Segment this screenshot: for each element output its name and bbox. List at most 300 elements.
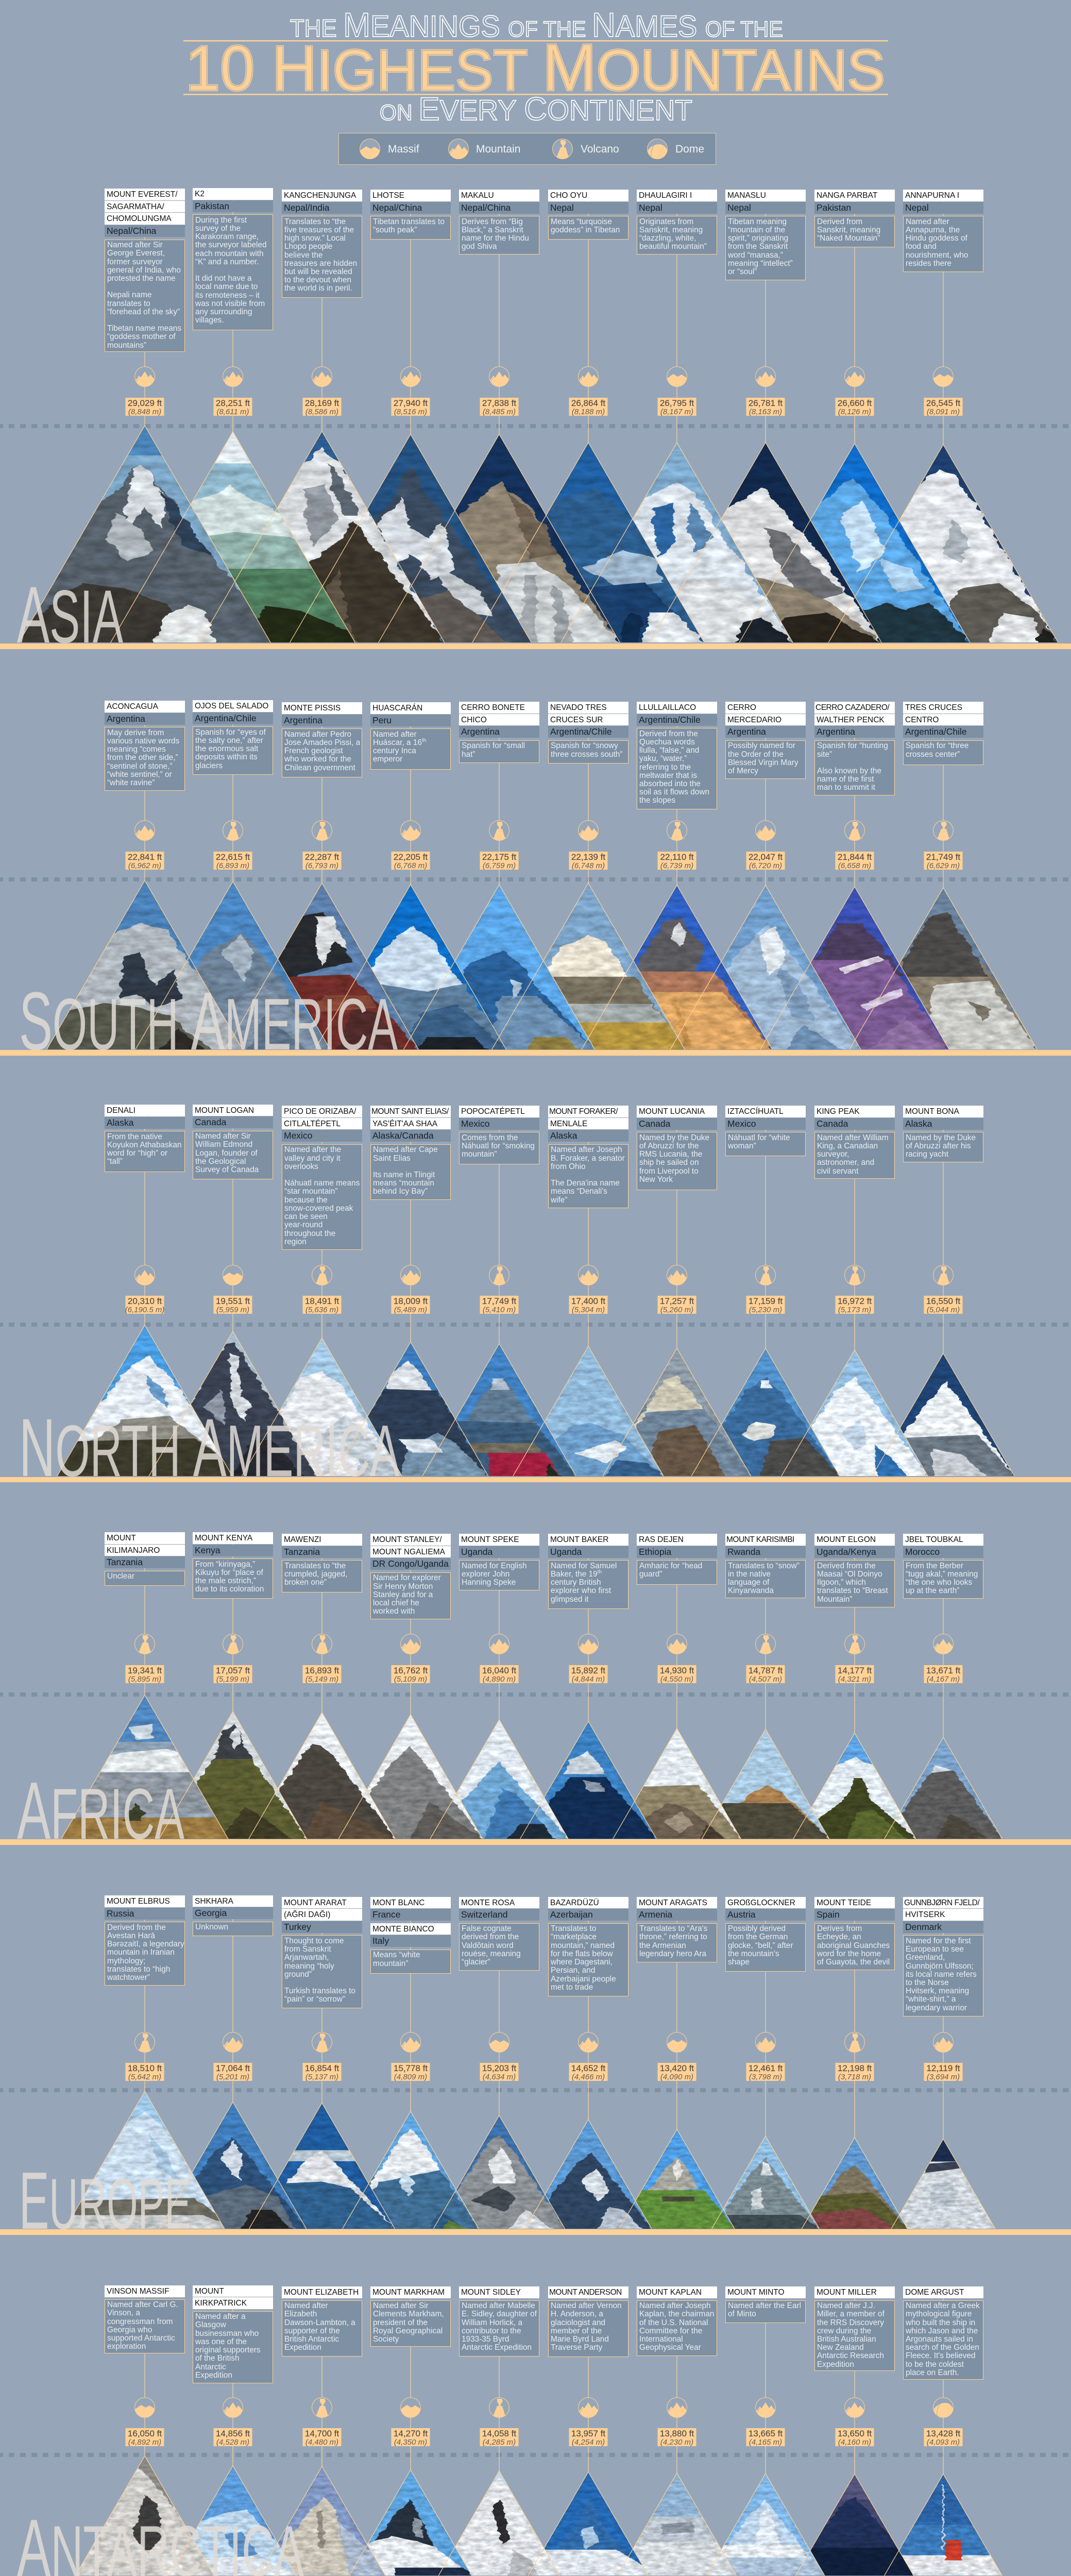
card: Mount Karisimbi: Translates to “snow” xyxy=(728,1562,800,1570)
card: Huascarán xyxy=(370,702,451,770)
card: Mount Elbrus: Bərəzaitī, a legendary xyxy=(107,1940,184,1948)
card: Mont Blanc / Monte Bianco: Means “white xyxy=(373,1951,420,1959)
elevation: Pico de Orizaba: 18,491 ft xyxy=(305,1296,339,1306)
icon: volcano xyxy=(756,1634,775,1654)
card: Mount Elizabeth: Named after xyxy=(284,2301,328,2310)
card: Mount Elgon: Maasai “Ol Doinyo xyxy=(817,1570,882,1579)
card: Bazardüzü: for the flats below xyxy=(551,1950,613,1958)
mountain outlines xyxy=(57,1325,1014,1476)
card: Mount Ararat: Turkey xyxy=(284,1922,311,1932)
elevation: Vinson Massif xyxy=(126,2428,164,2447)
card: Cerro Mercedario: Blessed Virgin Mary xyxy=(728,758,798,767)
card: Mount Everest: “forehead of the sky” xyxy=(107,308,180,316)
card: Mawenzi xyxy=(282,1534,362,1592)
card: Mount Speke xyxy=(459,1534,539,1590)
card: Cerro Bonete Chico: Argentina xyxy=(461,726,500,737)
card: Pico de Orizaba: Named after the xyxy=(284,1145,341,1154)
card: King Peak: Canada xyxy=(817,1118,848,1129)
card: Mount Foraker: from Ohio xyxy=(551,1162,586,1171)
card: Mount Teide: aboriginal Guanches xyxy=(817,1941,890,1950)
card: Kangchenjunga: treasures are hidden xyxy=(284,259,357,268)
card: Mount Everest: CHOMOLUNGMA xyxy=(107,214,172,223)
elevation: Mount Logan: (5,959 m) xyxy=(216,1306,249,1314)
elevation: Mount Elbrus: (5,642 m) xyxy=(128,2073,161,2081)
card: Mount Lucania: ship he sailed on xyxy=(639,1158,699,1167)
card: Dome Argust: Named after a Greek xyxy=(906,2301,980,2310)
elevation: Mount Kaplan: (4,230 m) xyxy=(660,2438,693,2447)
icon: mountain xyxy=(489,1634,509,1654)
elevation: Mount Bona xyxy=(924,1296,962,1314)
icon: mountain xyxy=(578,1634,599,1654)
card: Mount Anderson xyxy=(548,2286,628,2357)
elevation: Mount Kilimanjaro: (5,895 m) xyxy=(128,1675,161,1684)
card: Mount Everest: former surveyor xyxy=(107,258,163,266)
elevation: Llullaillaco: (6,739 m) xyxy=(660,861,693,870)
card: Mount Elbrus: mythology; xyxy=(107,1957,145,1965)
card: Mount Miller xyxy=(814,2286,895,2371)
card: Großglockner: from the German xyxy=(728,1933,788,1941)
icon: volcano xyxy=(933,1265,953,1285)
card: Mount Foraker: B. Foraker, a senator xyxy=(551,1154,625,1163)
card: Mount Everest: Nepali name xyxy=(107,291,151,299)
card: Cerro Mercedario: the Order of the xyxy=(728,750,784,759)
elevation: Mount Miller xyxy=(836,2428,874,2447)
card: Mount Logan: Canada xyxy=(195,1117,226,1127)
card: Mount Everest xyxy=(105,189,185,352)
photo: Tres Cruces Centro xyxy=(834,888,1052,1049)
photo: Shkhara xyxy=(147,2102,318,2229)
elevation: Lhotse: 27,940 ft xyxy=(394,398,428,408)
elevation: Dhaulagiri I xyxy=(657,398,696,416)
elevation: Manaslu: 26,781 ft xyxy=(749,398,783,408)
card: Huascarán: century Inca xyxy=(373,747,416,755)
card: Mount Foraker: wife” xyxy=(551,1196,568,1205)
card: Mount Miller: Miller, a member of xyxy=(817,2310,885,2318)
card: Mount Anderson: Marie Byrd Land xyxy=(551,2335,609,2344)
icon: volcano xyxy=(489,821,509,841)
elevation: Ojos del Salado xyxy=(213,852,252,870)
card: Monte Rosa xyxy=(459,1897,539,1971)
elevation: Mount Ararat: (5,137 m) xyxy=(305,2073,338,2081)
card: Mount Sidley: Antarctic Expedition xyxy=(462,2343,532,2352)
icon: mountain xyxy=(933,2032,954,2053)
elevation: Denali: (6,190.5 m) xyxy=(125,1306,164,1314)
elevation: Jbel Toubkal: 13,671 ft xyxy=(926,1666,960,1675)
elevation: Gunnbjørn Fjeld xyxy=(924,2063,962,2081)
card: Mount Speke: explorer John xyxy=(462,1570,509,1579)
card: Gunnbjørn Fjeld: “white-shirt,” a xyxy=(906,1995,956,2004)
icon: massif xyxy=(134,2398,155,2418)
card: Monte Pissis: Chilean government xyxy=(284,764,355,772)
photo: Mount Karisimbi xyxy=(691,1729,840,1839)
card: Mount Anderson: Traverse Party xyxy=(551,2343,602,2352)
card: Mount Lucania: from Liverpool to xyxy=(639,1167,699,1176)
elevation: Monte Pissis: 22,287 ft xyxy=(305,852,339,862)
photo: Cerro Mercedario xyxy=(655,885,876,1049)
card: Mount Foraker: MENLALE xyxy=(550,1120,587,1128)
elevation: Popocatépetl: (5,410 m) xyxy=(483,1306,516,1314)
card: Mount Stanley: MOUNT NGALIEMA xyxy=(372,1548,445,1556)
card: K2: It did not have a xyxy=(195,274,252,283)
card: Cerro Bonete Chico xyxy=(459,702,539,763)
card: Jbel Toubkal: JBEL TOUBKAL xyxy=(905,1535,963,1544)
photo: Mount Speke xyxy=(419,1720,580,1839)
card: Monte Rosa: “glacier” xyxy=(462,1958,490,1967)
card: Mount Bona: MOUNT BONA xyxy=(905,1107,959,1116)
card: Mount Kaplan: Committee for the xyxy=(639,2327,702,2335)
card: Nevado Tres Cruces Sur xyxy=(548,702,628,764)
card: Mount Foraker: Alaska xyxy=(550,1130,577,1141)
photo: Mount Miller xyxy=(786,2474,923,2575)
elevation: Mount Kaplan xyxy=(657,2428,696,2447)
card: Mount Aragats: Translates to “Ara's xyxy=(639,1924,707,1933)
elevation: Lhotse xyxy=(392,398,430,416)
card: Cerro Cazadero / Walther Penck: man to summit it xyxy=(817,783,875,792)
card: Dome Argust: DOME ARGUST xyxy=(905,2288,964,2297)
photo: Mount Everest xyxy=(0,426,291,642)
card: Großglockner: glocke, “bell,” after xyxy=(728,1941,793,1950)
elevation: Bazardüzü xyxy=(569,2063,608,2081)
card: K2 xyxy=(193,188,273,330)
photo: Iztaccíhuatl xyxy=(679,1348,852,1476)
icon: volcano xyxy=(489,1265,509,1285)
card: Mount Baker: Named for Samuel xyxy=(551,1562,617,1570)
card: Cho Oyu: Nepal xyxy=(550,202,574,213)
elevation: Denali: 20,310 ft xyxy=(128,1296,162,1306)
card: Mount Kenya xyxy=(193,1532,273,1599)
card: Cerro Mercedario: Possibly named for xyxy=(728,741,795,750)
card: Mount Stanley: worked with xyxy=(373,1607,415,1616)
card: Mount Elgon: MOUNT ELGON xyxy=(817,1535,876,1544)
card: Huascarán: HUASCARÁN xyxy=(372,704,422,713)
card: Mount Saint Elias: Alaska/Canada xyxy=(372,1130,434,1141)
elevation: Gunnbjørn Fjeld: (3,694 m) xyxy=(927,2073,960,2081)
icon: volcano xyxy=(489,2398,509,2418)
photo: Vinson Massif xyxy=(64,2456,226,2575)
card: Bazardüzü: “marketplace xyxy=(551,1933,597,1941)
elevation: Mount Elbrus: 18,510 ft xyxy=(128,2063,162,2073)
card: Mount Saint Elias xyxy=(370,1106,451,1200)
card: Pico de Orizaba: Náhuatl name means xyxy=(284,1179,360,1188)
icon: massif xyxy=(933,367,954,387)
card: Mount Logan: Survey of Canada xyxy=(195,1165,259,1174)
card: Mount Elizabeth: Expedition xyxy=(284,2343,321,2352)
card: Popocatépetl: Comes from the xyxy=(462,1133,518,1142)
card: Mount Kaplan: MOUNT KAPLAN xyxy=(639,2288,702,2297)
photo: Mount Baker xyxy=(509,1721,668,1839)
icon: mountain xyxy=(134,821,155,841)
elevation: Dome Argust xyxy=(924,2428,962,2447)
card: Gunnbjørn Fjeld: HVITSERK xyxy=(905,1910,945,1919)
elevation: Mount Minto: (4,165 m) xyxy=(749,2438,782,2447)
elevation: Mount Kenya: (5,199 m) xyxy=(216,1675,249,1684)
card: Llullaillaco: llulla, “false,” and xyxy=(639,746,699,755)
icon: mountain xyxy=(844,367,865,387)
icon: volcano xyxy=(312,1634,332,1654)
card: Mount Logan: Named after Sir xyxy=(195,1132,251,1141)
icon: volcano xyxy=(312,1265,332,1285)
panel: Europe xyxy=(0,1893,1071,2235)
icon: dome xyxy=(933,2398,954,2418)
card: Dhaulagiri I: Originates from xyxy=(639,217,693,226)
elevation: Bazardüzü: (4,466 m) xyxy=(572,2073,605,2081)
photo: Mount Saint Elias xyxy=(320,1342,501,1476)
elevation: Mount Elizabeth: (4,480 m) xyxy=(305,2438,338,2447)
card: Gunnbjørn Fjeld: European to see xyxy=(906,1945,964,1954)
card: Denali xyxy=(105,1105,185,1172)
elevation: Mount Kirkpatrick xyxy=(213,2428,252,2447)
card: Mount Stanley: MOUNT STANLEY/ xyxy=(372,1535,442,1544)
card: Ojos del Salado: the salty one,” after xyxy=(195,736,263,745)
elevation: Mont Blanc: 15,778 ft xyxy=(394,2063,428,2073)
elevation: Monte Rosa: (4,634 m) xyxy=(483,2073,516,2081)
card: Mount Karisimbi: language of xyxy=(728,1578,769,1587)
card: Mount Ararat: Thought to come xyxy=(284,1937,344,1945)
elevation: Mount Sidley xyxy=(480,2428,518,2447)
card: Tres Cruces Centro xyxy=(903,702,983,765)
chart: Asia elevations and mountains xyxy=(0,200,1071,649)
mountain outlines xyxy=(61,1695,1002,1839)
card: Mount Saint Elias: MOUNT SAINT ELIAS/ xyxy=(371,1107,449,1116)
elevation: Ras Dejen: 14,930 ft xyxy=(660,1666,694,1675)
elevation: Jbel Toubkal xyxy=(924,1665,962,1684)
card: Mawenzi: Tanzania xyxy=(284,1547,320,1557)
card: Dome Argust: which Jason and the xyxy=(906,2327,978,2335)
card: Mount Elizabeth: supporter of the xyxy=(284,2327,340,2335)
elevation: Mount Markham: 14,270 ft xyxy=(394,2429,428,2438)
elevation: Mount Everest xyxy=(126,398,164,416)
card: Manaslu: or “soul” xyxy=(728,267,757,276)
mountain outlines xyxy=(75,2456,1002,2575)
photo: Mount Elbrus xyxy=(52,2091,237,2229)
card: Denali: Koyukon Athabaskan xyxy=(107,1141,182,1149)
elevation: Popocatépetl xyxy=(480,1296,518,1314)
card: Pico de Orizaba: “star mountain” xyxy=(284,1187,338,1196)
icon: volcano xyxy=(553,139,572,159)
card: Bazardüzü: where Dagestani, xyxy=(551,1958,613,1967)
card: Mount Elgon: Mountain” xyxy=(817,1595,852,1604)
card: Tres Cruces Centro: Argentina/Chile xyxy=(905,726,967,737)
card: Mount Miller: Named after J.J. xyxy=(817,2301,875,2310)
photo: Jbel Toubkal xyxy=(875,1737,1012,1839)
card: Annapurna I: resides there xyxy=(906,259,951,268)
card: Manaslu: Tibetan meaning xyxy=(728,217,787,226)
card: Vinson Massif: VINSON MASSIF xyxy=(107,2287,169,2296)
icon: mountain xyxy=(578,1265,599,1285)
card: Mount Markham: Named after Sir xyxy=(373,2301,429,2310)
card: Mount Everest: protested the name xyxy=(107,274,176,283)
title line: The Meanings of the Names of the: THE MEANINGS OF THE NAMES OF THE xyxy=(290,6,783,44)
photo: Huascarán xyxy=(299,885,522,1049)
card: Mount Speke: Named for English xyxy=(462,1562,527,1570)
card: Monte Pissis: who worked for the xyxy=(284,755,351,764)
icon: mountain xyxy=(223,2032,243,2053)
photo: Mount Elgon xyxy=(783,1733,926,1839)
card: King Peak xyxy=(814,1106,895,1179)
icon: mountain xyxy=(400,821,421,841)
card: Großglockner: shape xyxy=(728,1958,750,1967)
card: Mount Ararat: from Sanskrit xyxy=(284,1945,331,1954)
elevation: Mount Ararat: 16,854 ft xyxy=(305,2063,339,2073)
card: Mount Miller: MOUNT MILLER xyxy=(817,2288,877,2297)
photo: Ras Dejen xyxy=(603,1728,751,1839)
card: King Peak: astronomer, and xyxy=(817,1158,874,1167)
card: Mount Saint Elias: YAS'ÉIT'AA SHAA xyxy=(372,1120,437,1128)
elevation: Mount Minto xyxy=(746,2428,785,2447)
card: Mount Ararat: (AĞRI DAĞI) xyxy=(284,1910,330,1919)
card: Monte Pissis: Argentina xyxy=(284,715,322,725)
card: Monte Pissis xyxy=(282,702,362,777)
elevation: Huascarán: 22,205 ft xyxy=(394,852,428,862)
card: Annapurna I: Named after xyxy=(906,217,949,226)
elevation: Mount Lucania: (5,260 m) xyxy=(660,1306,693,1314)
card: Vinson Massif: exploration xyxy=(107,2342,146,2351)
card: Llullaillaco: Derived from the xyxy=(639,730,698,738)
card: Pico de Orizaba: snow-covered peak xyxy=(284,1204,353,1213)
card: Mawenzi: MAWENZI xyxy=(284,1535,321,1544)
card: Cerro Cazadero / Walther Penck: Spanish for “hunting xyxy=(817,741,888,750)
card: Aconcagua: from the other side,” xyxy=(107,753,178,762)
elevation: Cerro Bonete Chico: (6,759 m) xyxy=(483,861,516,870)
card: Mount Karisimbi: in the native xyxy=(728,1570,771,1579)
card: Mont Blanc / Monte Bianco xyxy=(370,1897,451,1974)
icon: mountain xyxy=(755,367,776,387)
photo: Cerro Bonete Chico xyxy=(388,885,610,1049)
elevation: Iztaccíhuatl xyxy=(746,1296,785,1314)
card: Llullaillaco: meltwater that is xyxy=(639,771,697,780)
icon: mountain xyxy=(578,821,599,841)
elevation: Ojos del Salado: 22,615 ft xyxy=(216,852,250,862)
card: Nevado Tres Cruces Sur: NEVADO TRES xyxy=(550,703,607,712)
card: Mount Bona xyxy=(903,1106,983,1162)
card: Mount Kirkpatrick: MOUNT xyxy=(195,2286,224,2296)
card: Popocatépetl: Mexico xyxy=(461,1118,489,1129)
card: Annapurna I: Nepal xyxy=(905,202,929,213)
icon: mountain xyxy=(223,367,243,387)
elevation: Mount Karisimbi xyxy=(746,1665,785,1684)
card: Pico de Orizaba: throughout the xyxy=(284,1229,335,1238)
card: Mont Blanc / Monte Bianco: MONTE BIANCO xyxy=(372,1925,434,1934)
card: Mount Sidley: 1933-35 Byrd xyxy=(462,2335,509,2344)
card: Mount Kaplan: Named after Joseph xyxy=(639,2301,711,2310)
card: Gunnbjørn Fjeld: Denmark xyxy=(905,1922,942,1932)
elevation: Tres Cruces Centro xyxy=(924,852,962,870)
elevation: Mount Minto: 13,665 ft xyxy=(749,2429,783,2438)
photo: Mount Logan xyxy=(135,1331,331,1476)
elevation: Ojos del Salado: (6,893 m) xyxy=(216,861,249,870)
card: Llullaillaco xyxy=(637,702,717,809)
elevation: Lhotse: (8,516 m) xyxy=(394,408,427,416)
card: Nanga Parbat: “Naked Mountain” xyxy=(817,234,880,243)
photo: Aconcagua xyxy=(31,880,259,1049)
elevation: Iztaccíhuatl: 17,159 ft xyxy=(749,1296,783,1306)
elevation: King Peak xyxy=(836,1296,874,1314)
elevation: Bazardüzü: 14,652 ft xyxy=(571,2063,605,2073)
card: Vinson Massif: Named after Carl G. xyxy=(107,2300,178,2309)
card: Gunnbjørn Fjeld xyxy=(903,1897,983,2016)
card: Mount Baker: MOUNT BAKER xyxy=(550,1535,608,1544)
icon: volcano xyxy=(223,821,243,841)
card: Annapurna I: Annapurna, the xyxy=(906,226,960,234)
elevation: Cerro Mercedario xyxy=(746,852,785,870)
elevation: Mount Speke: (4,890 m) xyxy=(483,1675,516,1684)
elevation: Jbel Toubkal: (4,167 m) xyxy=(927,1675,960,1684)
card: Mount Minto: MOUNT MINTO xyxy=(727,2288,785,2297)
icon: massif xyxy=(489,2032,509,2053)
card: Cho Oyu: CHO OYU xyxy=(550,191,587,200)
card: Huascarán: Huáscar, a 16th xyxy=(373,738,426,747)
card: Mawenzi: broken one” xyxy=(284,1578,327,1587)
card: Monte Rosa: derived from the xyxy=(462,1933,519,1941)
icon: mountain xyxy=(578,367,599,387)
card: K2: K2 xyxy=(195,190,205,198)
icon: volcano xyxy=(845,821,864,841)
elevation: Monte Rosa xyxy=(480,2063,518,2081)
icon: mountain xyxy=(400,1265,421,1285)
photo: Denali xyxy=(43,1325,247,1476)
card: Mount Stanley: Stanley and for a xyxy=(373,1590,433,1599)
panel: South America xyxy=(0,696,1071,1056)
card: Mount Markham: MOUNT MARKHAM xyxy=(372,2288,445,2297)
elevation: Popocatépetl: 17,749 ft xyxy=(482,1296,516,1306)
card: Pico de Orizaba: year-round xyxy=(284,1221,322,1229)
card: Mount Everest: Named after Sir xyxy=(107,241,163,249)
card: Cerro Bonete Chico: hat” xyxy=(462,750,475,759)
card: Cerro Bonete Chico: CERRO BONETE xyxy=(461,703,525,712)
card: Dome Argust: mythological figure xyxy=(906,2310,972,2318)
card: Mount Teide: Derives from xyxy=(817,1924,862,1933)
card: Mount Kirkpatrick: was one of the xyxy=(195,2337,247,2346)
legend label: massif: Massif xyxy=(388,143,419,155)
card: Monte Pissis: Jose Amadeo Pissi, a xyxy=(284,738,360,747)
elevation: Mount Kirkpatrick: (4,528 m) xyxy=(216,2438,249,2447)
card: Gunnbjørn Fjeld: GUNNBJØRN FJELD/ xyxy=(904,1898,979,1907)
card: Makalu: Derives from “Big xyxy=(462,217,523,226)
card: Mount Saint Elias: Saint Elias xyxy=(373,1154,411,1163)
card: Cerro Mercedario: CERRO xyxy=(727,703,756,712)
card: Mount Aragats: Armenia xyxy=(639,1909,672,1920)
icon: mountain xyxy=(312,367,332,387)
card: Pico de Orizaba: overlooks xyxy=(284,1162,318,1171)
chart: North America elevations and mountains xyxy=(0,1103,1071,1483)
card: Mount Kaplan: of the U.S. National xyxy=(639,2318,708,2327)
card: Ojos del Salado xyxy=(193,700,273,775)
elevation: Cerro Cazadero: 21,844 ft xyxy=(838,852,872,862)
card: Mount Lucania: Named by the Duke xyxy=(639,1133,709,1142)
card: Nevado Tres Cruces Sur: Spanish for “snowy xyxy=(551,741,618,750)
card: Popocatépetl: mountain” xyxy=(462,1150,497,1159)
photo: Mount Lucania xyxy=(591,1348,763,1476)
elevation: Kangchenjunga: 28,169 ft xyxy=(305,398,339,408)
elevation: Großglockner: (3,798 m) xyxy=(749,2073,782,2081)
elevation: Nanga Parbat: (8,126 m) xyxy=(838,408,871,416)
card: Mount Kaplan: Kaplan, the chairman xyxy=(639,2310,714,2318)
elevation: Nanga Parbat: 26,660 ft xyxy=(838,398,872,408)
elevation: Mount Aragats: 13,420 ft xyxy=(660,2063,694,2073)
chart: Europe elevations and mountains xyxy=(0,1893,1071,2235)
photo: Cerro Cazadero xyxy=(745,887,964,1049)
elevation: Tres Cruces Centro: 21,749 ft xyxy=(926,852,960,862)
card: Manaslu: meaning “intellect” xyxy=(728,259,793,268)
card: Monte Pissis: MONTE PISSIS xyxy=(284,704,341,713)
card: Mount Miller: Antarctic Research xyxy=(817,2351,884,2360)
elevation: Gunnbjørn Fjeld: 12,119 ft xyxy=(927,2063,960,2073)
elevation: Monte Rosa: 15,203 ft xyxy=(482,2063,516,2073)
card: Ojos del Salado: the enormous salt xyxy=(195,744,258,753)
card: Mount Kenya: Kenya xyxy=(195,1545,220,1555)
icon: volcano xyxy=(135,1634,155,1654)
card: Mount Foraker xyxy=(548,1106,628,1208)
